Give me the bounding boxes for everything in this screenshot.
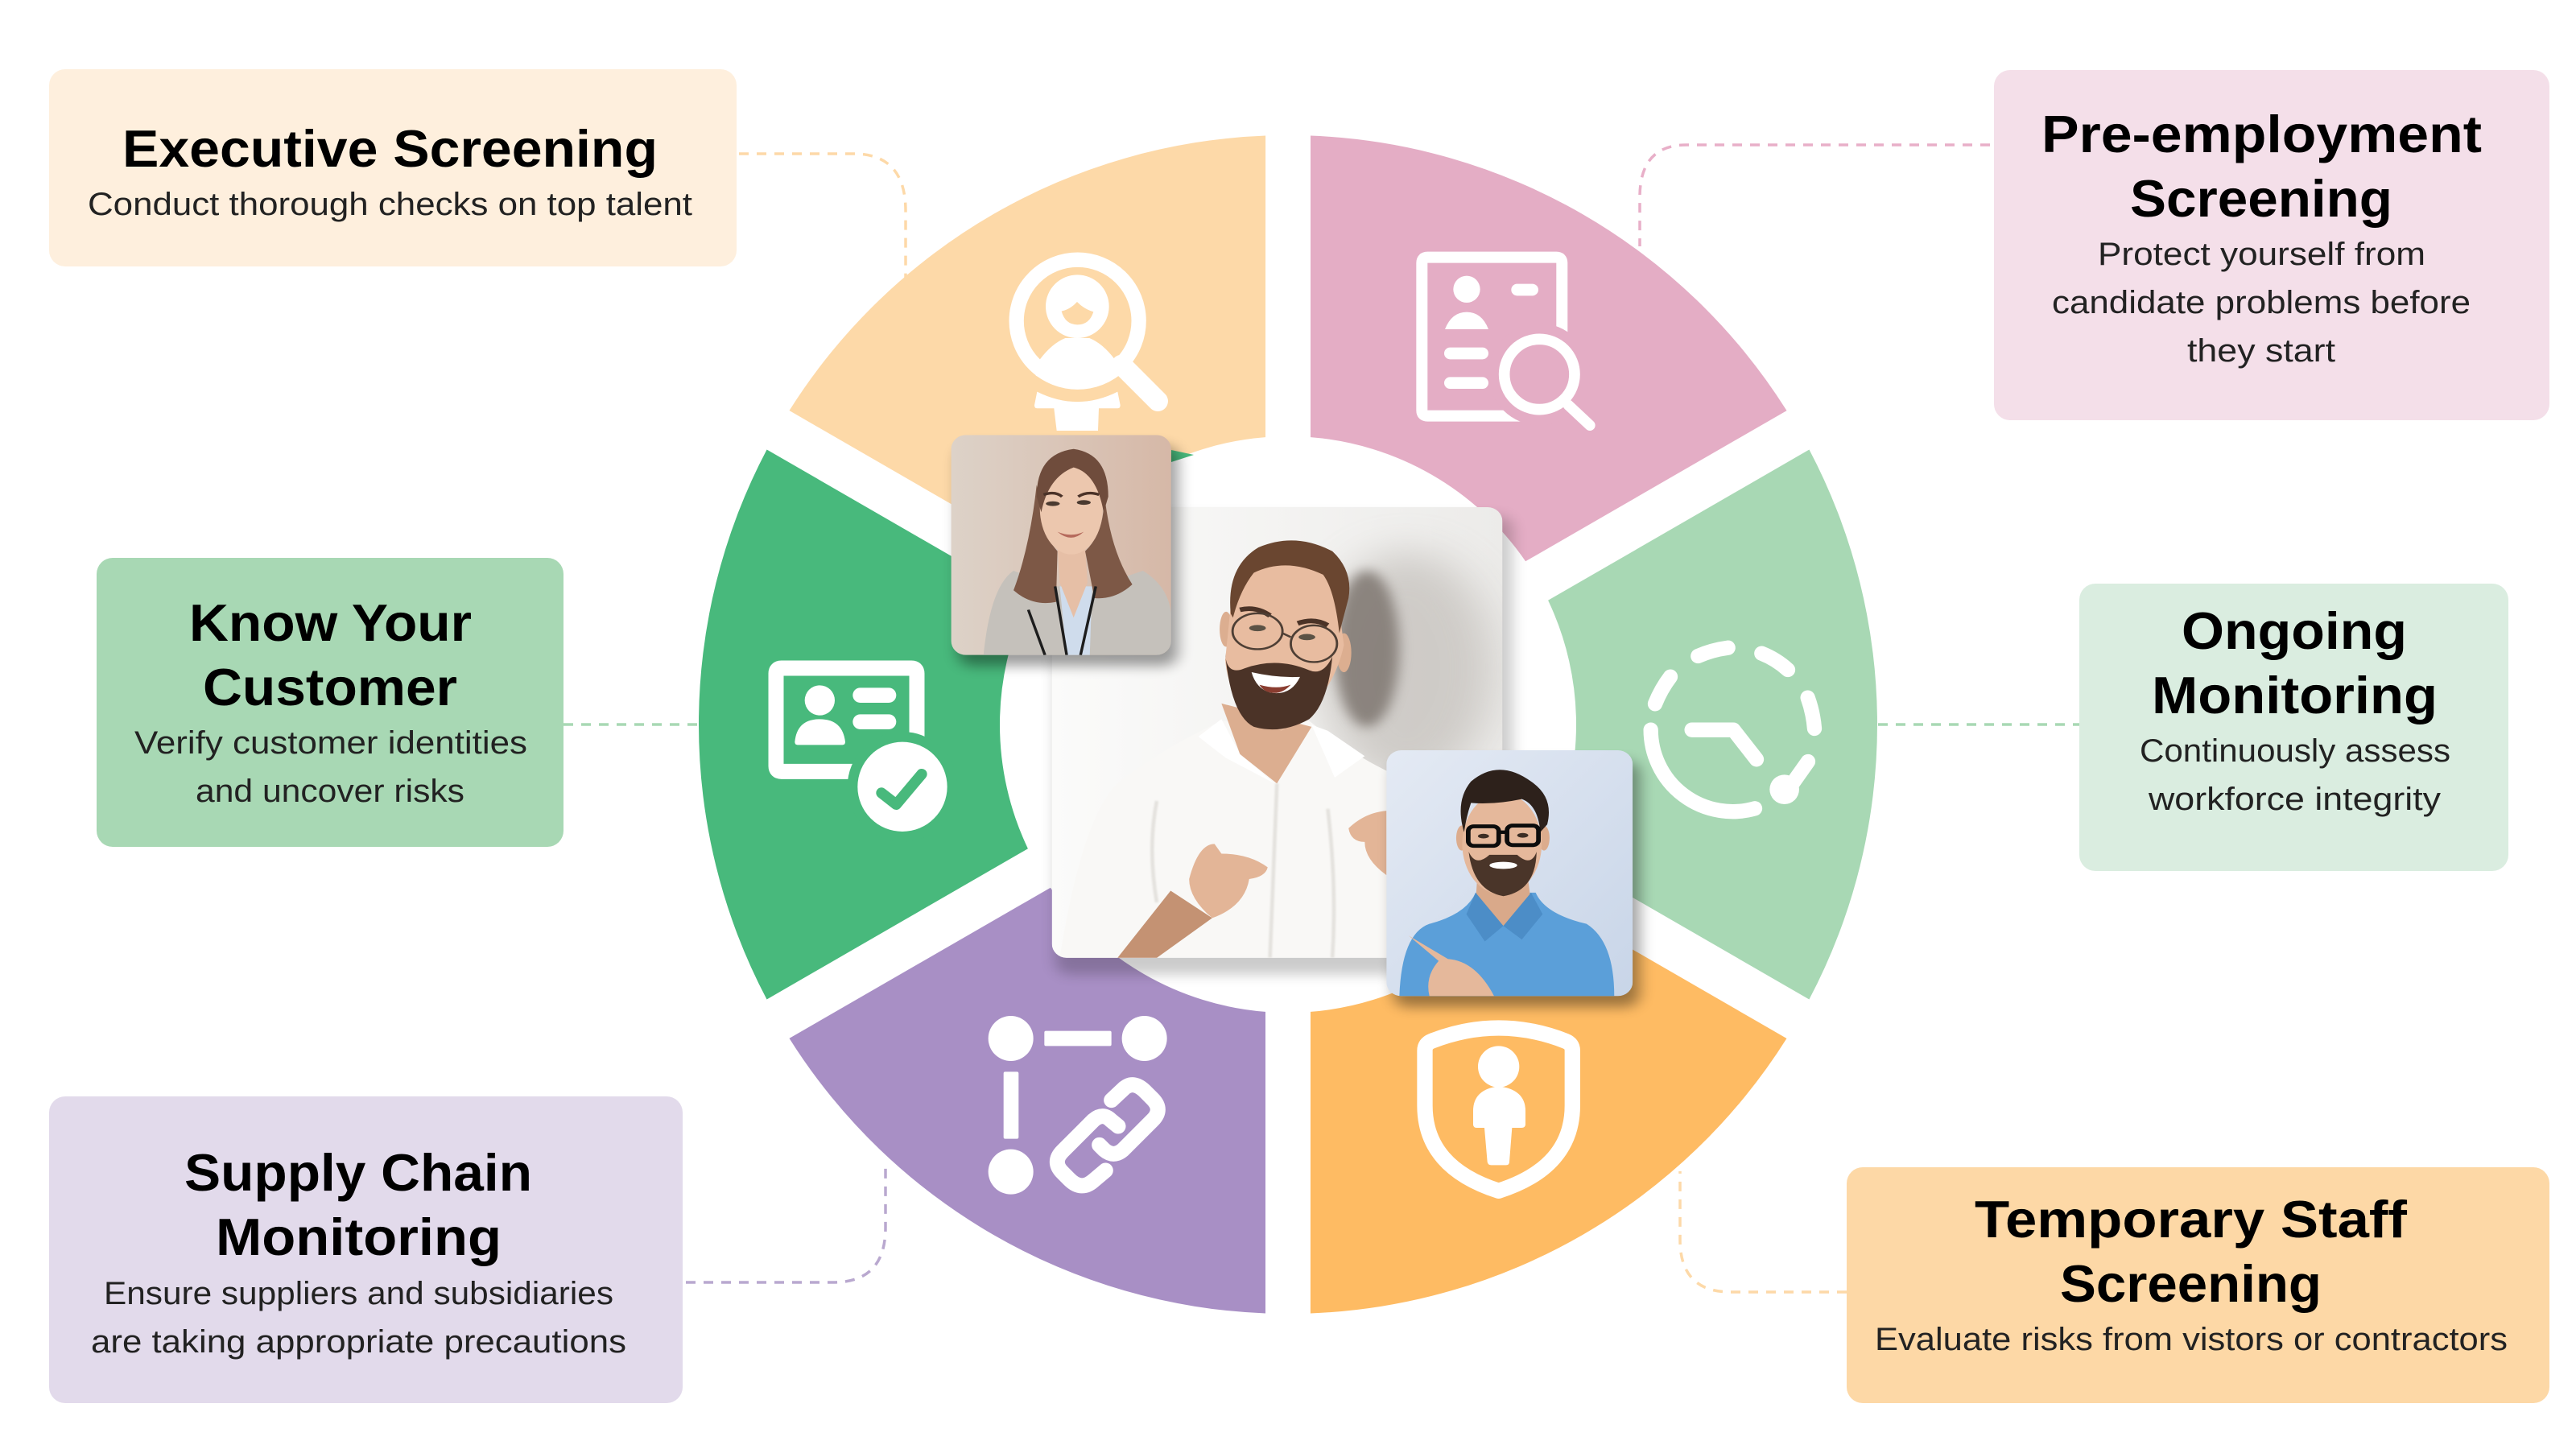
icon: dashed clock [1651,648,1814,811]
description: pre-employment screening: candidate problems before [2052,285,2471,320]
green sliver beside woman photo [1171,450,1194,462]
heading: know your customer: Customer [203,658,457,716]
heading: ongoing monitoring [2152,601,2438,724]
segment: know your customer [529,374,1135,999]
photo: main man pointing [1052,507,1513,975]
connector: pre-employment screening [1640,145,1990,246]
heading: pre-employment screening [2041,105,2482,228]
photo: man with black glasses [1386,750,1640,1007]
description: pre-employment screening [2052,237,2471,369]
description: ongoing monitoring: workforce integrity [2148,782,2441,817]
description: know your customer: Verify customer identities [134,725,527,761]
connector: know your customer [564,723,700,726]
description: know your customer: and uncover risks [196,774,464,809]
description: executive screening: Conduct thorough checks on top talent [88,187,692,222]
segment: executive screening [790,0,1396,623]
panel: ongoing monitoring [2079,584,2508,871]
connector: executive screening [739,154,906,278]
heading: ongoing monitoring: Monitoring [2152,666,2438,724]
heading: supply chain monitoring [184,1143,532,1266]
segment: ongoing monitoring [1441,450,2047,1075]
heading: temporary staff screening: Temporary Staff [1975,1190,2407,1249]
description: know your customer [134,725,527,809]
segment: supply chain monitoring [789,888,1265,1313]
description: ongoing monitoring [2140,733,2450,817]
segment: temporary staff screening [1180,826,1786,1449]
panel: supply chain monitoring [49,1096,683,1403]
icon: id card with check [776,668,957,842]
description: supply chain monitoring [91,1276,626,1360]
heading: temporary staff screening: Screening [2060,1254,2322,1313]
heading: ongoing monitoring: Ongoing [2182,601,2407,660]
panel: know your customer [97,558,564,847]
heading: supply chain monitoring: Supply Chain [184,1143,532,1202]
description: pre-employment screening: Protect yourself from [2098,237,2425,272]
connector: temporary staff screening [1680,1171,1847,1292]
connector: supply chain monitoring [686,1163,886,1282]
icon: magnifier over person [1017,260,1158,431]
icon: shield with person [1425,1028,1572,1191]
segment: pre-employment screening [1311,136,1787,561]
icon: nodes and chain link [989,1016,1167,1195]
panel: executive screening [49,69,737,266]
heading: know your customer: Know Your [189,593,472,652]
heading: pre-employment screening: Pre-employment [2041,105,2482,163]
connector: ongoing monitoring [1878,723,2079,726]
central photo group [952,435,1640,1007]
heading: know your customer [189,593,472,716]
description: ongoing monitoring: Continuously assess [2140,733,2450,769]
description: pre-employment screening: they start [2187,333,2335,369]
heading: supply chain monitoring: Monitoring [216,1208,502,1266]
wheel [529,0,2047,1449]
photo: woman with lanyard [952,435,1178,666]
panel: pre-employment screening [1994,70,2549,420]
description: temporary staff screening: Evaluate risks from vistors or contractors [1875,1322,2508,1357]
heading: temporary staff screening [1975,1190,2407,1313]
heading: executive screening: Executive Screening [122,119,658,178]
heading: pre-employment screening: Screening [2130,169,2392,228]
icon: document with magnifier [1422,258,1591,425]
description: supply chain monitoring: Ensure suppliers and subsidiaries [104,1276,613,1311]
description: supply chain monitoring: are taking appropriate precautions [91,1324,626,1360]
panel: temporary staff screening [1847,1167,2549,1403]
